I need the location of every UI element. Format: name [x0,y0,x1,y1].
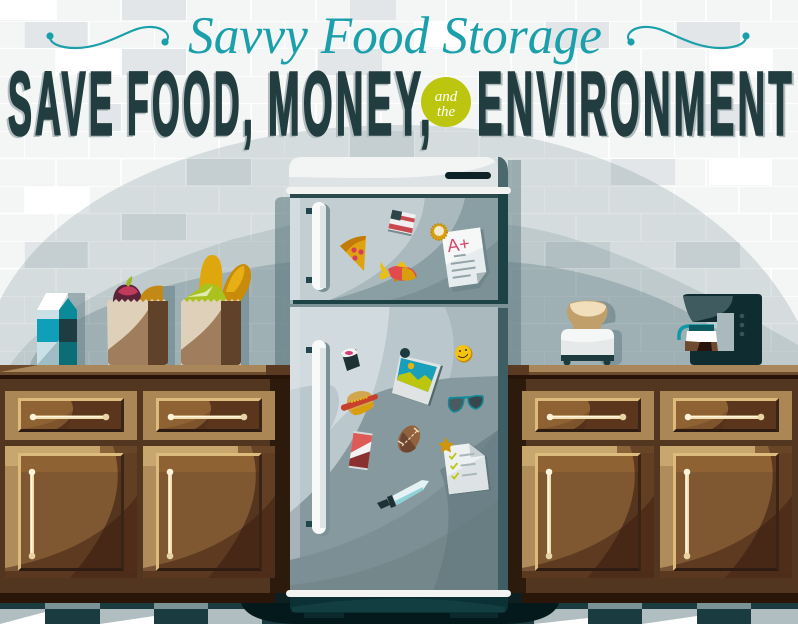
drawers [5,391,275,440]
left cabinet [0,365,290,603]
magnet: sunglasses [449,396,483,412]
headline shadow: SAVE [6,56,114,156]
carafe [679,326,714,340]
headline text: MONEY, [268,54,434,154]
magnet: star [438,437,454,452]
title: main headline [6,54,797,156]
drawers [522,391,792,440]
magnet: sushi [341,348,360,371]
headline shadow: FOOD, [125,56,254,156]
magnet: hot dog [341,391,378,415]
milk carton [37,293,85,365]
doors [522,446,792,578]
note: A+ paper: A+ [446,233,471,256]
right cabinet [508,365,798,603]
script heading: Savvy Food Storage [188,7,602,65]
headline shadow: MONEY, [266,56,432,156]
toaster [561,301,622,366]
toaster body [561,329,614,355]
magnet: smiley [455,345,472,362]
magnet: football [393,422,425,456]
headline text [8,54,795,154]
wall light dome shading [0,125,798,365]
magnet: fish [379,261,416,282]
coffee maker [679,294,762,365]
doors [5,446,275,578]
swirl left [48,27,168,48]
floor checker [0,600,798,624]
note: checklist [443,441,491,495]
top bar [286,187,511,194]
apple [113,276,142,302]
headline text: SAVE [8,54,116,154]
freezer handle [306,202,330,292]
fridge floor shadow [240,600,560,624]
headline text: FOOD, [127,54,256,154]
magnet: sword [377,480,429,509]
badge: and the [421,77,471,127]
refrigerator [286,157,511,618]
countertop [508,365,798,375]
badge: and the: and [435,89,458,105]
magnet: flag [388,210,416,236]
badge: and the: the [437,104,456,120]
magnet: pizza slice [340,236,366,271]
swirl right [628,27,748,48]
lower door [290,307,508,591]
baguette right [220,264,251,302]
grocery bag 1 [107,276,175,365]
note: A+ paper [441,227,491,292]
toast [567,301,608,329]
lower handle [306,340,330,536]
title: Savvy Food Storage [48,7,748,65]
countertop [0,365,290,375]
grocery bag 2 [181,255,251,365]
magnet: sun pin [431,224,447,240]
magnet: polaroid photo [392,348,443,406]
freezer door [289,194,508,308]
fridge top [289,157,508,193]
baguette left [199,255,222,290]
fridge base [286,590,511,618]
magnet: soda can [349,431,373,470]
greens [182,284,227,302]
bread [140,286,163,302]
headline shadow [6,56,797,156]
wall tiles [0,0,798,365]
